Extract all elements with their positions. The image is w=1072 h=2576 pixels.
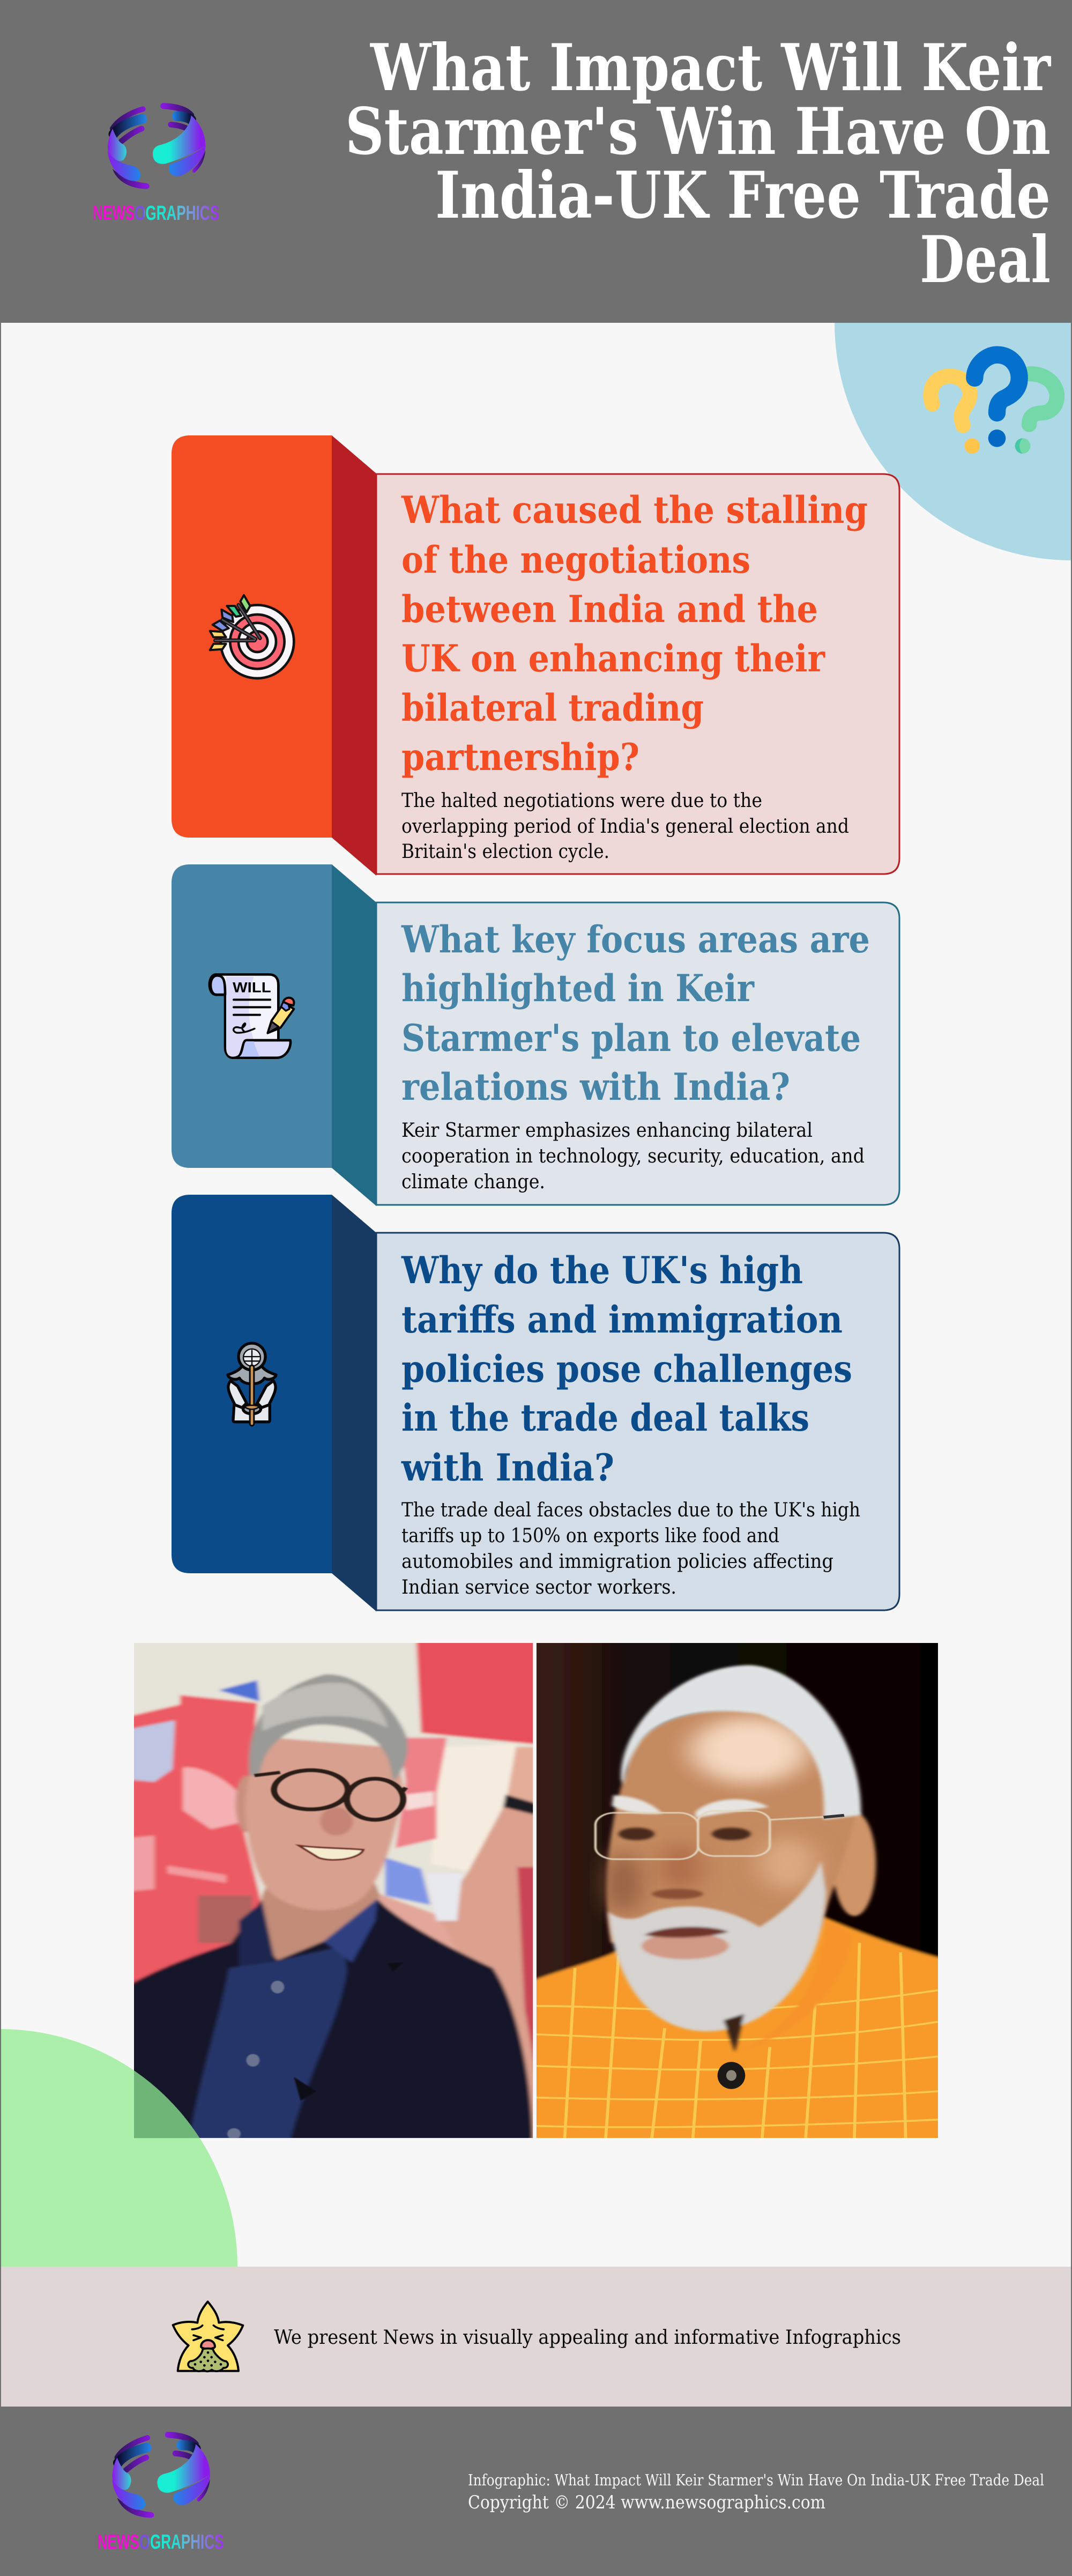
icon: will scroll and pencil: WILL bbox=[233, 980, 271, 996]
band: tagline bbox=[0, 2267, 1072, 2407]
body 2 bbox=[401, 1120, 865, 1193]
fold 3 bbox=[332, 1195, 376, 1611]
panel: question 3 bbox=[172, 1195, 899, 1611]
heading 3: policies pose challenges bbox=[401, 1348, 852, 1391]
fold 2 bbox=[332, 864, 376, 1206]
footer text: Copyright © 2024 www.newsographics.com bbox=[468, 2492, 825, 2513]
body 3 bbox=[401, 1499, 860, 1598]
body 2: cooperation in technology, security, education, and bbox=[401, 1145, 865, 1167]
body 1: The halted negotiations were due to the bbox=[401, 790, 762, 812]
header bar bbox=[0, 0, 1072, 323]
icon: kendo fighter bbox=[228, 1343, 276, 1424]
decorative blue circle bbox=[835, 85, 1072, 560]
tagline text: We present News in visually appealing and informative Infographics bbox=[274, 2327, 901, 2349]
colored tab 2 bbox=[172, 864, 332, 1168]
heading 2: relations with India? bbox=[401, 1065, 790, 1109]
icon: target with arrows bbox=[210, 595, 294, 678]
body 1: overlapping period of India's general election and bbox=[401, 816, 849, 838]
panel: question 2 bbox=[172, 864, 899, 1206]
footer text bbox=[468, 2471, 1044, 2513]
heading 3: with India? bbox=[401, 1446, 614, 1490]
heading 2 bbox=[401, 918, 870, 1109]
heading 3 bbox=[401, 1249, 852, 1490]
heading 2: What key focus areas are bbox=[401, 918, 870, 961]
photo: Narendra Modi bbox=[536, 1643, 938, 2138]
card 3 bbox=[376, 1233, 899, 1610]
panel: question 1 bbox=[172, 435, 899, 876]
heading 1: of the negotiations bbox=[401, 538, 750, 582]
colored tab 3 bbox=[172, 1195, 332, 1573]
icon: question marks bbox=[930, 355, 1057, 454]
kurta check lines bbox=[537, 1943, 938, 2138]
logo: header: NEWSOGRAPHICS bbox=[93, 202, 219, 225]
title bbox=[345, 30, 1051, 298]
heading 1: What caused the stalling bbox=[401, 488, 868, 532]
fold 1 bbox=[332, 435, 376, 876]
heading 1: bilateral trading bbox=[401, 686, 704, 730]
heading 3: tariffs and immigration bbox=[401, 1298, 843, 1342]
body 3: The trade deal faces obstacles due to the UK's high bbox=[401, 1499, 860, 1521]
footer bar bbox=[0, 2407, 1072, 2576]
heading 2: Starmer's plan to elevate bbox=[401, 1017, 861, 1060]
body 1 bbox=[401, 790, 849, 863]
logo: footer bbox=[98, 2435, 224, 2553]
heading 3: in the trade deal talks bbox=[401, 1396, 809, 1440]
heading 1 bbox=[401, 488, 868, 779]
logo: header bbox=[93, 106, 219, 225]
logo: footer: NEWSOGRAPHICS bbox=[98, 2531, 224, 2553]
body 3: tariffs up to 150% on exports like food and bbox=[401, 1525, 779, 1547]
body 1: Britain's election cycle. bbox=[401, 841, 609, 863]
heading 3: Why do the UK's high bbox=[401, 1249, 803, 1292]
icon: sick star bbox=[173, 2301, 243, 2371]
photo: Keir Starmer bbox=[134, 1643, 533, 2138]
green overlap on photo bbox=[134, 2070, 199, 2138]
body 3: Indian service sector workers. bbox=[401, 1576, 676, 1598]
body 3: automobiles and immigration policies affecting bbox=[401, 1551, 833, 1573]
decorative green circle bbox=[0, 2029, 237, 2504]
heading 1: partnership? bbox=[401, 736, 639, 779]
heading 1: between India and the bbox=[401, 588, 818, 631]
card 2 bbox=[376, 902, 899, 1205]
body 2: Keir Starmer emphasizes enhancing bilateral bbox=[401, 1120, 813, 1142]
heading 1: UK on enhancing their bbox=[401, 637, 825, 680]
body 2: climate change. bbox=[401, 1171, 545, 1193]
card 1 bbox=[376, 474, 899, 874]
colored tab 1 bbox=[172, 435, 332, 838]
icon: will scroll and pencil bbox=[210, 974, 294, 1058]
heading 2: highlighted in Keir bbox=[401, 967, 755, 1010]
